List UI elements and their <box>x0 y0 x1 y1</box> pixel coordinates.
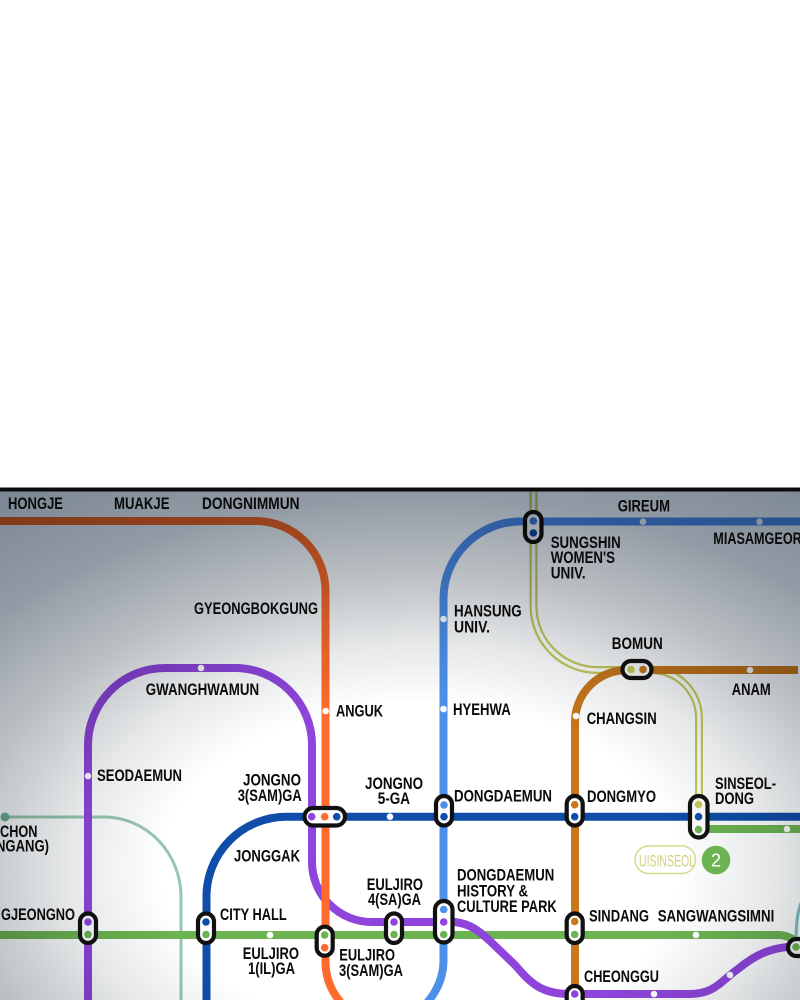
station labels: JONGGAK <box>234 848 300 866</box>
line: right-edge teal branch <box>796 903 800 942</box>
station labels: GIREUM <box>618 498 670 516</box>
station labels: ANGUK <box>336 703 383 721</box>
station: right-edge interchange <box>788 939 800 956</box>
station labels: CULTURE PARK <box>457 898 557 916</box>
station labels: GJEONGNO <box>1 906 75 924</box>
station labels: CITY HALL <box>220 906 287 924</box>
station labels: ANAM <box>732 681 771 699</box>
top border bar <box>0 488 800 492</box>
station labels: UNIV. <box>454 619 490 637</box>
station: Euljiro 4(sa)-ga interchange <box>386 914 402 943</box>
station: City Hall interchange <box>198 914 214 943</box>
station labels: SINSEOL- <box>715 775 776 793</box>
station labels: MUAKJE <box>114 495 170 513</box>
station labels: DONGMYO <box>587 788 656 806</box>
station labels: SINDANG <box>589 908 649 926</box>
station: Cheonggu interchange <box>567 986 583 1000</box>
line: Gyeongui-Jungang (teal) <box>0 812 181 1000</box>
station labels <box>0 495 800 986</box>
station: Jongno 3(sam)-ga interchange <box>304 808 345 826</box>
station labels: JONGNO <box>243 772 301 790</box>
station: Sinseol-dong interchange <box>690 796 708 838</box>
station labels: HONGJE <box>8 495 63 513</box>
line 1 (dark blue) <box>206 817 800 1000</box>
station labels: 3(SAM)GA <box>238 787 302 805</box>
station labels: DONG <box>715 790 754 808</box>
station labels: HISTORY & <box>457 883 528 901</box>
line 5 (purple) <box>88 668 800 1000</box>
line: Ui-Sinseol (double olive) <box>534 485 699 816</box>
station labels: BOMUN <box>612 635 663 653</box>
line 6 (brown) <box>575 670 798 1000</box>
station: Dongdaemun History & Culture Park interchange <box>435 901 452 942</box>
station labels: 3(SAM)GA <box>339 962 403 980</box>
station: Sindang interchange <box>567 914 583 943</box>
station: Sungshin Women's Univ. interchange <box>525 512 542 542</box>
station labels: UNIV. <box>551 565 586 583</box>
station: Dongmyo interchange <box>567 796 583 826</box>
station labels: GYEONGBOKGUNG <box>194 600 318 618</box>
line 3 (orange) <box>0 521 346 1000</box>
station labels: DONGDAEMUN <box>457 867 554 885</box>
station labels: SUNGSHIN <box>551 534 621 552</box>
vignette overlay <box>0 491 800 1000</box>
station labels: 4(SA)GA <box>368 891 421 909</box>
subway map panel <box>0 485 800 1000</box>
station labels: EULJIRO <box>339 947 395 965</box>
station labels: EULJIRO <box>243 945 299 963</box>
station labels: CHON <box>0 823 38 841</box>
station labels: DONGDAEMUN <box>454 788 552 806</box>
legend: Ui-Sinseol line badge: UISINSEOL <box>639 852 695 870</box>
station labels: JONGNO <box>365 775 423 793</box>
legend: line 2 badge: 2 <box>711 850 721 870</box>
station labels: HANSUNG <box>454 603 522 621</box>
station: Bomun interchange <box>622 661 652 678</box>
station labels: 5-GA <box>378 790 410 808</box>
legend: Ui-Sinseol line badge <box>635 846 696 874</box>
station labels: CHEONGGU <box>584 968 659 986</box>
station labels: GWANGHWAMUN <box>146 681 259 699</box>
line 4 (blue) <box>425 522 800 1000</box>
station labels: CHANGSIN <box>587 710 657 728</box>
station labels: WOMEN'S <box>551 549 615 567</box>
station: Chungjeongno interchange <box>80 914 96 943</box>
station: Dongdaemun interchange <box>436 796 452 826</box>
station labels: HYEHWA <box>453 701 511 719</box>
station labels: DONGNIMMUN <box>202 495 300 513</box>
white station dots <box>85 518 790 997</box>
line 2 (green) <box>0 829 800 945</box>
station labels: SEODAEMUN <box>97 767 182 785</box>
station labels: EULJIRO <box>367 876 423 894</box>
legend: line 2 badge <box>702 846 730 874</box>
station labels: SANGWANGSIMNI <box>658 908 774 926</box>
station labels: 1(IL)GA <box>248 960 295 978</box>
station: Euljiro 3(sam)-ga interchange <box>317 927 333 956</box>
